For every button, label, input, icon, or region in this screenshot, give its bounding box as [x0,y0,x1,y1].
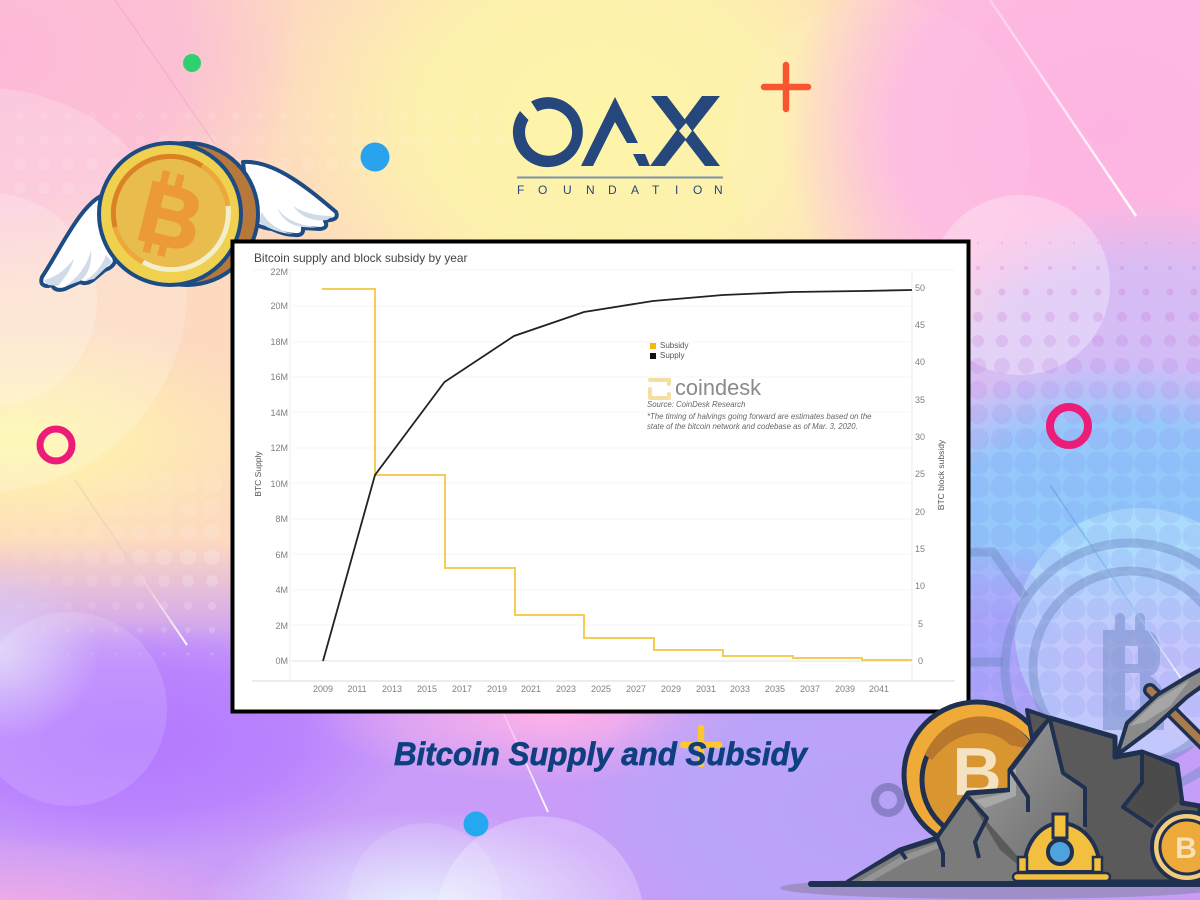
x axis: 2041 [869,684,889,694]
right axis: 0 [918,656,923,666]
left axis: 14M [270,408,288,418]
left axis: 20M [270,301,288,311]
small coin [1152,812,1200,882]
coin edge [116,143,258,285]
x axis: 2035 [765,684,785,694]
source note [647,400,872,431]
right axis [915,283,925,666]
right axis: 20 [915,507,925,517]
x axis: 2033 [730,684,750,694]
logo: OAX Foundation [513,96,723,197]
ground shadow [780,877,1200,899]
left axis: 10M [270,479,288,489]
right axis: 10 [915,581,925,591]
decoration: blue dot bottom [464,812,488,836]
x axis: 2019 [487,684,507,694]
source note: Source: CoinDesk Research [647,400,745,409]
coin rings [115,227,143,262]
x axis: 2011 [347,684,367,694]
pickaxe [1117,667,1200,755]
x axis: 2029 [661,684,681,694]
logo wordmark: FOUNDATION [517,183,723,197]
x axis: 2021 [521,684,541,694]
miner helmet [1013,814,1110,881]
right axis: 35 [915,395,925,405]
diagonal streaks [990,0,1136,216]
panel: chart [232,242,968,712]
left axis: 0M [275,656,288,666]
left axis: 8M [275,514,288,524]
decoration: green dot [183,54,201,72]
source note: state of the bitcoin network and codebase as of Mar. 3, 2020. [647,422,858,431]
dots [978,243,1200,439]
grid lines [252,270,955,681]
left axis: 2M [275,621,288,631]
decoration: yellow plus [683,728,719,764]
logo rule [517,176,723,178]
x axis [313,684,889,694]
x axis: 2017 [452,684,472,694]
decoration: lilac ring [875,787,901,813]
chart title: Bitcoin supply and block subsidy by year [254,251,468,265]
x axis: 2023 [556,684,576,694]
icon: winged bitcoin [41,143,337,290]
left wing [41,195,115,290]
large coin [904,702,1050,848]
right axis: 40 [915,357,925,367]
left axis: 4M [275,585,288,595]
rock pile [848,710,1200,882]
faint bitcoin medallion, right background [970,543,1200,793]
right wing [243,162,337,235]
x axis: 2009 [313,684,333,694]
legend: Supply [660,351,684,360]
x axis: 2013 [382,684,402,694]
left axis: 16M [270,372,288,382]
right axis: 45 [915,320,925,330]
x axis: 2031 [696,684,716,694]
x axis: 2015 [417,684,437,694]
x axis: 2037 [800,684,820,694]
right axis: 50 [915,283,925,293]
left axis: 6M [275,550,288,560]
coin symbol: B [952,734,1002,810]
legend: Subsidy [660,341,688,350]
left axis title: BTC Supply [253,451,263,497]
left axis: 18M [270,337,288,347]
decoration: orange plus [764,65,808,109]
small coin: B [1175,832,1197,865]
x axis: 2025 [591,684,611,694]
left axis: 22M [270,267,288,277]
legend [650,341,688,360]
bitcoin symbol: B [129,163,212,271]
right axis: 30 [915,432,925,442]
source note: *The timing of halvings going forward are estimates based on the [647,412,872,421]
right axis: 5 [918,619,923,629]
coin face [99,143,241,285]
left axis [270,267,288,666]
x axis: 2039 [835,684,855,694]
logo mark [513,96,720,167]
supply line [323,290,912,661]
coindesk logo: coindesk [675,375,761,400]
decoration: pink ring left [40,429,72,461]
ground line [811,881,1200,887]
right axis: 25 [915,469,925,479]
x axis: 2027 [626,684,646,694]
right axis title: BTC block subsidy [936,439,946,510]
decoration: blue dot [360,142,390,172]
left axis: 12M [270,443,288,453]
illustration: mine with coins and pickaxe [780,667,1200,899]
subsidy line [322,289,912,660]
right axis: 15 [915,544,925,554]
caption: Bitcoin Supply and Subsidy [394,736,809,772]
decoration: pink ring right [1050,407,1088,445]
streak over medallion [1050,485,1182,680]
